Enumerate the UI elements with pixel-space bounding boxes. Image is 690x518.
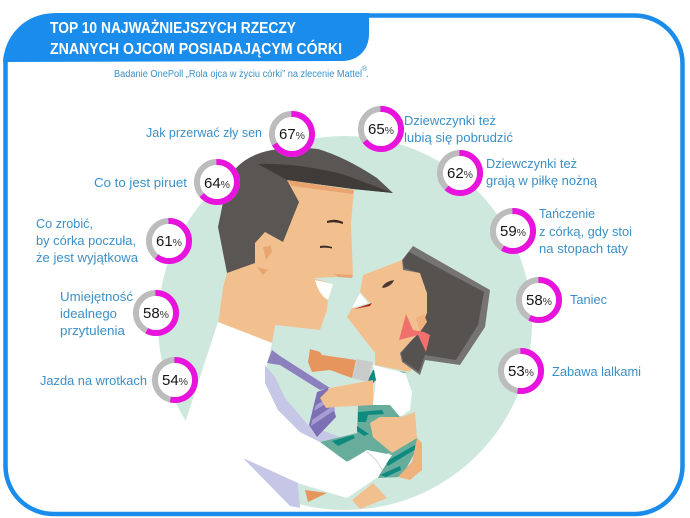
label: Co zrobić: że jest wyjątkowa [36, 250, 139, 265]
daughter's shoe [305, 490, 327, 502]
donut: 65%: 65% [368, 121, 394, 138]
donut: 62%: 62% [447, 165, 473, 182]
label: Dziewczynki też grają w piłkę nożną: Dziewczynki też [486, 156, 577, 171]
daughter's ear [416, 314, 427, 332]
donut: 58% left [136, 293, 176, 333]
subtitle: ® [362, 65, 368, 73]
daughter's hair [400, 246, 490, 375]
donut: 54% [155, 360, 195, 400]
daughter's torso and legs [320, 405, 420, 478]
label: Dziewczynki też grają w piłkę nożną: grają w piłkę nożną [486, 173, 598, 188]
donut: 62% [440, 153, 480, 193]
title: TOP 10 NAJWAŻNIEJSZYCH RZECZY [50, 20, 297, 37]
label: Umiejętność idealnego przytulenia [60, 289, 134, 338]
daughter's foot [352, 483, 387, 509]
father's hair highlight [258, 164, 393, 193]
subtitle: Badanie OnePoll „Rola ojca w życiu córki” na zlecenie Mattel [114, 69, 362, 80]
donut: 59%: 59% [500, 223, 526, 240]
daughter's bow [399, 314, 430, 352]
label: Dziewczynki też lubią się pobrudzić: lubią się pobrudzić [404, 130, 513, 145]
daughter's cuff [352, 359, 373, 382]
daughter's eye [382, 280, 394, 288]
daughter's collar [367, 370, 407, 386]
father's hand on back [370, 412, 417, 453]
daughter's face [347, 260, 430, 372]
donut: 64%: 64% [204, 175, 230, 192]
subtitle: . [366, 69, 369, 80]
label: Jazda na wrotkach: Jazda na wrotkach [40, 373, 147, 388]
tie blade [309, 388, 336, 437]
daughter's arm on tie [320, 380, 373, 408]
father's nose shade [334, 274, 353, 278]
tie knot and band [267, 350, 330, 390]
daughter's mouth [352, 293, 368, 308]
label: Dziewczynki też lubią się pobrudzić: Dziewczynki też [404, 113, 496, 128]
donut: 53% [501, 351, 541, 391]
forehead shadow [287, 180, 354, 194]
shirt collar shade [265, 365, 340, 442]
daughter's lip [354, 303, 372, 309]
label: Tańczenie z córką: na stopach taty [539, 241, 629, 256]
father's eyes [320, 220, 343, 248]
daughter's hair inner [401, 252, 484, 372]
label: Dziewczynki też lubią się pobrudzić [404, 113, 513, 145]
label: Co zrobić [36, 216, 139, 265]
donut: 65% [361, 109, 401, 149]
father's ear detail [257, 246, 272, 275]
donut: 58% right: 58% [526, 292, 552, 309]
shirt lower shade [243, 458, 300, 508]
father's hair [218, 148, 393, 273]
label: Tańczenie z córką: z córką, gdy stoi [539, 224, 632, 239]
donut: 67%: 67% [279, 126, 305, 143]
donut: 54%: 54% [162, 372, 188, 389]
label: Tańczenie z córką [539, 206, 632, 256]
donut: 53%: 53% [508, 363, 534, 380]
father's sleeve [298, 442, 392, 498]
daughter's arm reaching [308, 349, 356, 378]
title: ZNANYCH OJCOM POSIADAJĄCYM CÓRKI [50, 40, 342, 58]
donut: 58% left: 58% [143, 305, 169, 322]
label: Co zrobić: by córka poczuła, [36, 233, 136, 248]
illustration: father and daughter [165, 148, 490, 509]
sleeve fold [367, 452, 382, 470]
label: Co to jest piruet: Co to jest piruet [94, 175, 187, 190]
title [50, 20, 342, 58]
label: Taniec: Taniec [570, 292, 607, 307]
father's teeth [315, 280, 333, 300]
father's shirt [165, 322, 347, 509]
label: Dziewczynki też grają w piłkę nożną [486, 156, 598, 188]
label: Jak przerwać zły sen: Jak przerwać zły sen [146, 125, 262, 140]
label: Tańczenie z córką: Tańczenie [539, 206, 595, 221]
donut: 64% [197, 162, 237, 202]
label: Umiejętność idealnego przytulenia: Umiejętność [60, 289, 134, 304]
label: Umiejętność idealnego przytulenia: idealnego [60, 306, 117, 321]
tie stripes [311, 396, 335, 426]
background circle [158, 136, 532, 510]
label: Co zrobić: Co zrobić, [36, 216, 93, 231]
donut: 58% right [519, 280, 559, 320]
donut: 61% [149, 221, 189, 261]
header banner [3, 13, 369, 62]
father's fingers [398, 438, 422, 480]
label: Zabawa lalkami: Zabawa lalkami [552, 364, 641, 379]
label: Umiejętność idealnego przytulenia: przytulenia [60, 323, 126, 338]
dress stripes [332, 410, 416, 477]
daughter's shirt [373, 365, 412, 417]
father's neck and face [218, 180, 354, 343]
donut: 61%: 61% [156, 233, 182, 250]
donut: 67% [272, 114, 312, 154]
donut: 59% [493, 211, 533, 251]
